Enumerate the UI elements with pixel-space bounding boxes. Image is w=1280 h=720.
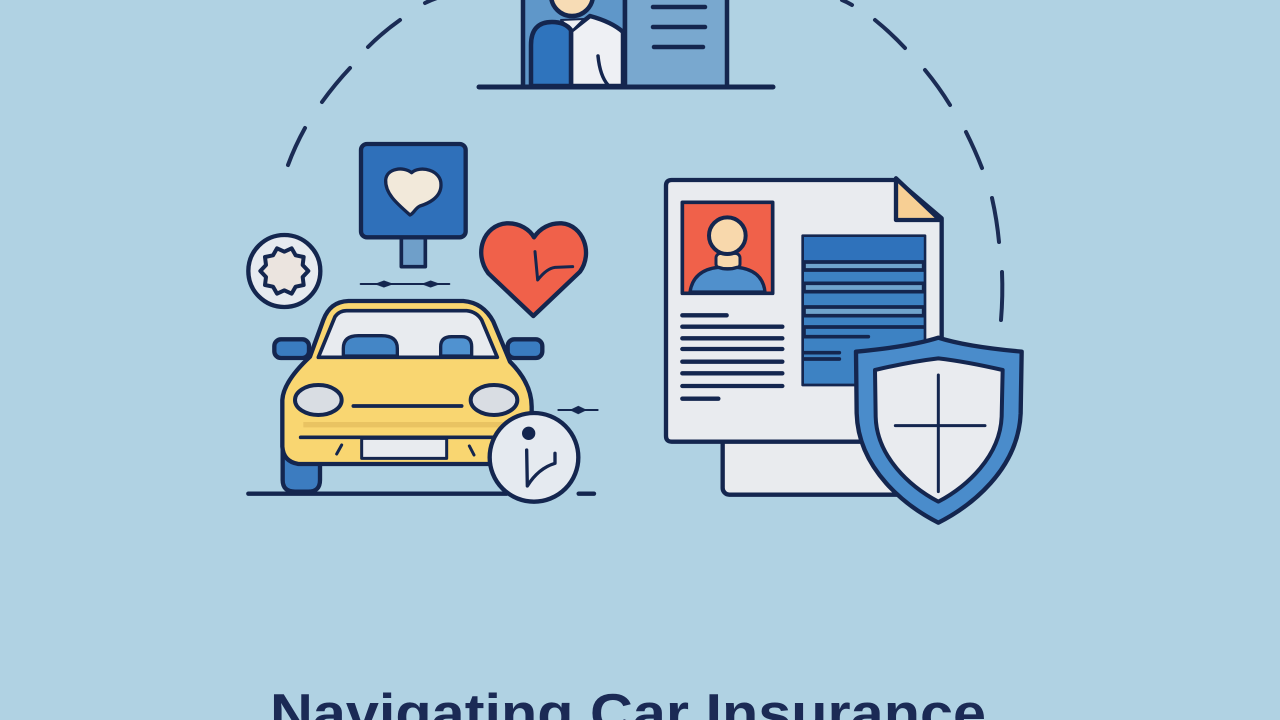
icon: info badge [490, 413, 578, 502]
right mirror [508, 339, 542, 358]
agent jacket blue side [531, 22, 571, 86]
agent collar [561, 19, 584, 31]
form row 4 [804, 327, 924, 337]
form row 1 [804, 262, 924, 270]
badge circle [248, 235, 320, 307]
body shadow band [303, 422, 507, 427]
form row 2 [804, 283, 924, 292]
wheel [283, 450, 320, 492]
illustration: policy document with shield [666, 178, 1022, 523]
shield inner [875, 358, 1003, 502]
info circle [490, 413, 578, 502]
shield outer [856, 338, 1022, 523]
double arrow above car [361, 281, 449, 287]
icon: gear badge [248, 235, 320, 307]
form row 3 [804, 307, 924, 316]
hood line [353, 400, 462, 411]
license plate [362, 438, 447, 458]
icon: sign post [401, 237, 425, 267]
car body [282, 301, 532, 464]
agent jacket white side [571, 16, 623, 86]
dashed arc connecting the icons [288, 0, 1002, 320]
shoulders [690, 267, 765, 292]
arm fold [598, 56, 608, 85]
profile photo [682, 202, 773, 293]
agent head [551, 0, 593, 16]
arrow right of car [558, 406, 598, 414]
ground line [248, 487, 507, 500]
bumper line [301, 432, 493, 443]
main document page [666, 180, 942, 442]
document panel [625, 0, 727, 87]
gear shape [260, 248, 308, 294]
ground dash [579, 487, 594, 500]
icon: blue sign with heart [361, 144, 466, 237]
back sheet [723, 423, 909, 495]
pulse line [535, 252, 573, 280]
photo background [682, 202, 773, 293]
sign board [361, 144, 466, 237]
right seat [441, 337, 472, 356]
right headlight [471, 385, 517, 415]
agent booth left panel [523, 0, 625, 87]
neck [716, 253, 740, 269]
bumper ticks [337, 445, 474, 455]
info dot [522, 427, 535, 440]
icon: insurance agent at desk [479, 0, 773, 87]
icon: yellow car [274, 301, 542, 492]
blue form block [803, 236, 925, 385]
left seat [343, 336, 397, 356]
folded corner [896, 178, 940, 220]
shield cross [895, 375, 985, 492]
form top band [804, 237, 924, 261]
windshield [318, 311, 497, 357]
head [709, 217, 746, 254]
illustration: car with health and info icons [248, 144, 598, 502]
left headlight [295, 385, 342, 415]
document text lines [653, 7, 705, 47]
icon: red heart with pulse [481, 223, 586, 316]
left mirror [274, 339, 309, 358]
info stroke [527, 450, 555, 486]
desk line [479, 84, 773, 90]
text lines [682, 315, 782, 399]
icon: shield [856, 338, 1022, 523]
form row 5 [804, 353, 839, 359]
heart [481, 223, 586, 316]
sign heart [386, 169, 441, 215]
form background [803, 236, 925, 385]
